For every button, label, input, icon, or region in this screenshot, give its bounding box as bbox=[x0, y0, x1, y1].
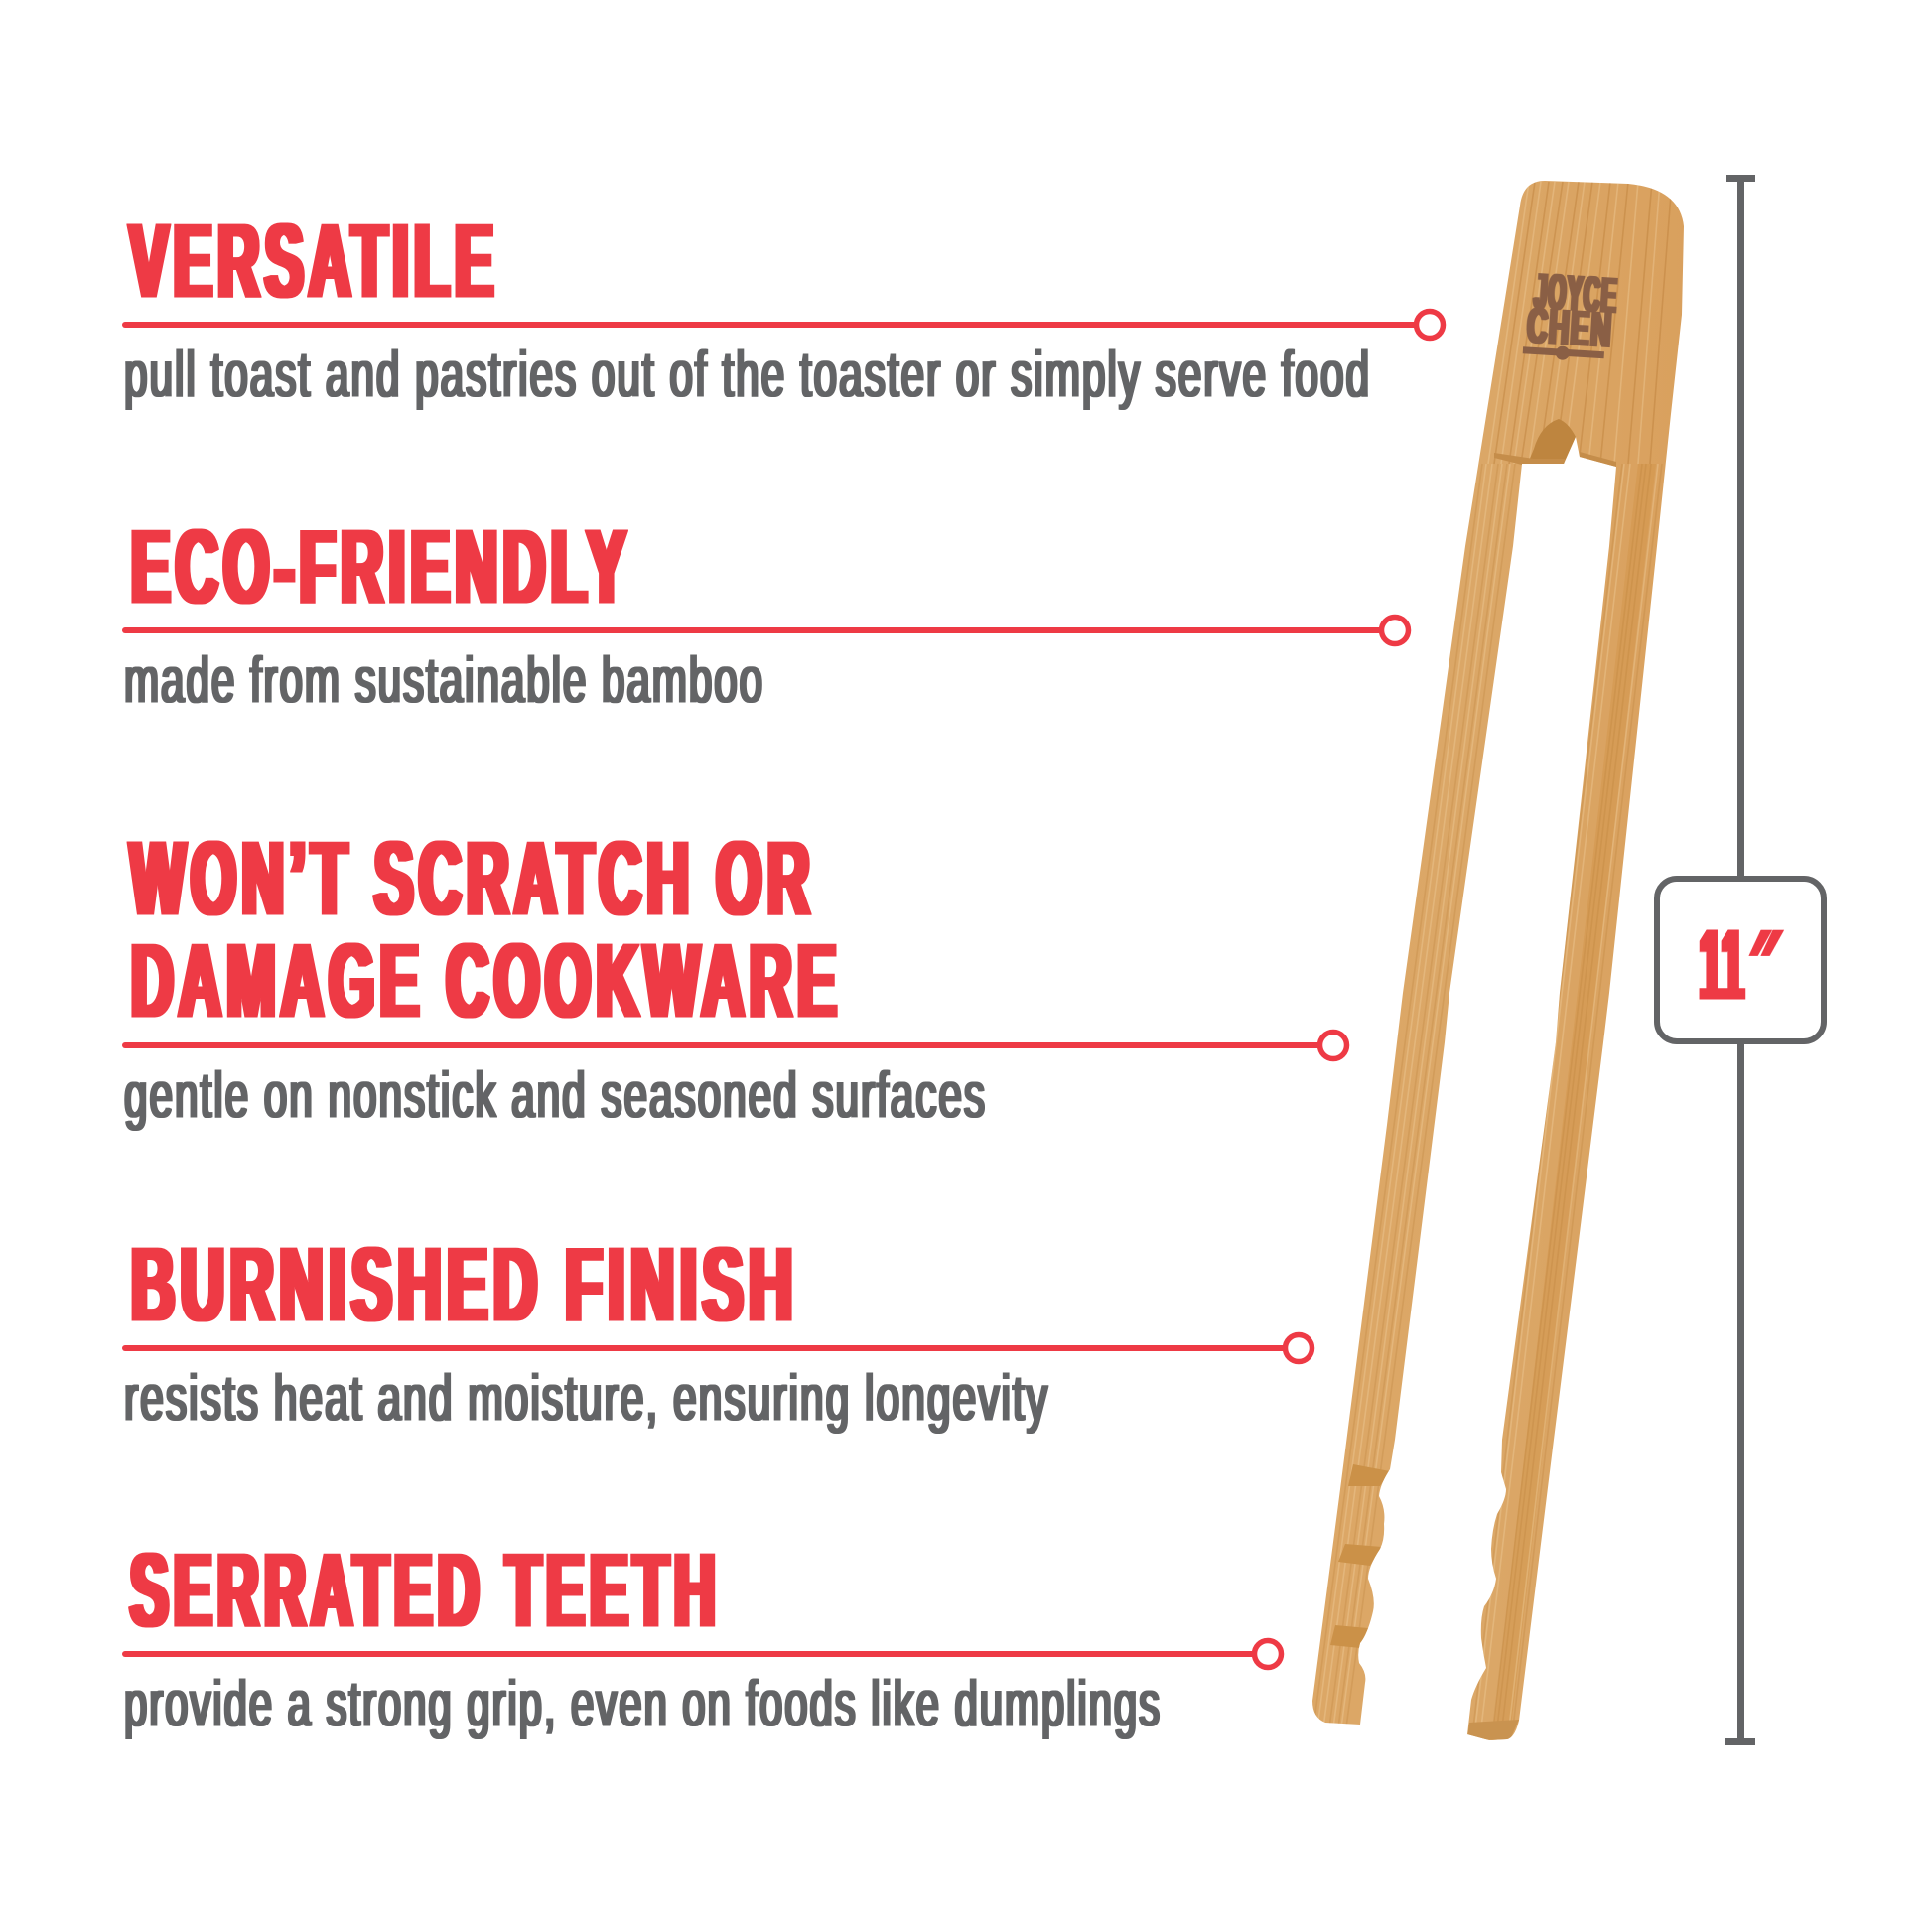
heading: damage cookware line 2: DAMAGE COOKWARE bbox=[131, 922, 842, 1039]
description: won't scratch: gentle on nonstick and seasoned surfaces bbox=[124, 1058, 987, 1131]
leader line: versatile bbox=[125, 312, 1444, 338]
heading: burnished finish: BURNISHED FINISH bbox=[131, 1226, 798, 1343]
description: burnished finish: resists heat and moisture, ensuring longevity bbox=[124, 1361, 1049, 1434]
right arm orange band bbox=[1493, 464, 1656, 1727]
tongs body bbox=[1312, 181, 1684, 1740]
dimension indicator bbox=[1657, 175, 1824, 1745]
right arm tip bbox=[1467, 1720, 1519, 1742]
description: serrated teeth: provide a strong grip, even on foods like dumplings bbox=[124, 1667, 1162, 1739]
inch mark: ″ bbox=[1723, 910, 1791, 1021]
leader line: serrated teeth bbox=[125, 1640, 1281, 1668]
dimension line bbox=[1725, 175, 1755, 1745]
feature: burnished finish bbox=[124, 1226, 1312, 1434]
leader line: won't scratch bbox=[125, 1033, 1346, 1058]
notch recess bbox=[1529, 419, 1576, 464]
heading: serrated teeth: SERRATED TEETH bbox=[130, 1532, 721, 1649]
dimension box bbox=[1657, 879, 1824, 1041]
head underside left bbox=[1494, 453, 1566, 465]
leader line: burnished finish bbox=[125, 1334, 1312, 1362]
bamboo tongs: JOYCE bbox=[1533, 263, 1619, 324]
heading: won't scratch line 1: WON’T SCRATCH OR bbox=[130, 820, 815, 937]
leader line: eco-friendly bbox=[125, 618, 1408, 643]
feature: versatile bbox=[124, 203, 1444, 410]
head underside right bbox=[1580, 452, 1616, 468]
wood grain bbox=[1313, 182, 1672, 1742]
feature: eco-friendly bbox=[124, 508, 1408, 716]
bamboo tongs bbox=[1312, 181, 1684, 1740]
feature: won't scratch bbox=[124, 820, 1346, 1131]
logo bar bbox=[1522, 344, 1604, 362]
heading: eco-friendly: ECO-FRIENDLY bbox=[131, 508, 631, 625]
dimension label: 11 bbox=[1700, 909, 1745, 1021]
brand logo bbox=[1522, 262, 1619, 363]
logo text: chen: CHEN bbox=[1526, 298, 1614, 358]
left arm teeth faces bbox=[1330, 1464, 1390, 1648]
heading: versatile: VERSATILE bbox=[129, 203, 498, 320]
description: eco-friendly: made from sustainable bamboo bbox=[124, 643, 764, 716]
feature: serrated teeth bbox=[124, 1532, 1281, 1739]
